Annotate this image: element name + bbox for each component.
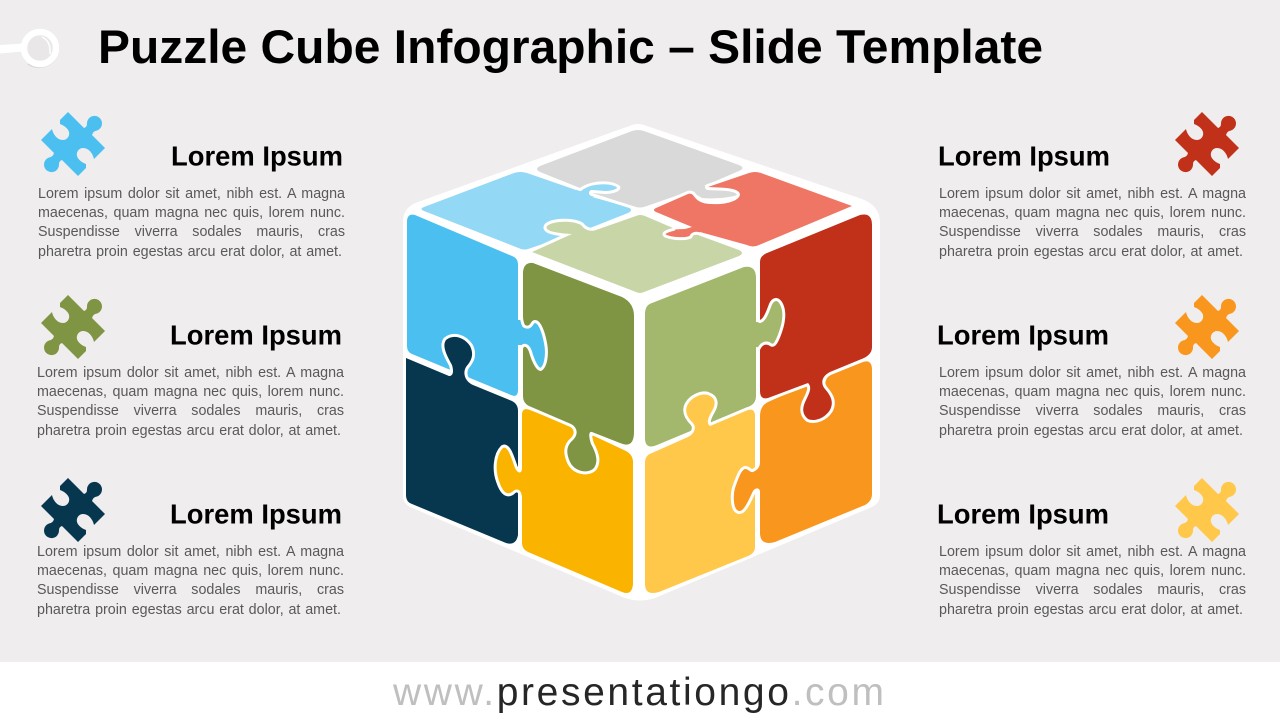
text block left 3: maecenas, quam magna nec quis, lorem nunc. [37,563,344,579]
text block left 3: pharetra proin egestas arcu erat dolor, at amet. [37,602,341,618]
icon: yellow puzzle piece [1175,478,1239,542]
text block left 1: Suspendisse viverra sodales mauris, cras [38,224,345,240]
text block left 2: maecenas, quam magna nec quis, lorem nunc. [37,384,344,400]
logo ring [0,32,58,67]
heading: Lorem Ipsum left 1: Lorem Ipsum [171,140,343,172]
piece: gray top [537,130,742,208]
piece: pale green top [532,215,742,293]
text block right 2: Suspendisse viverra sodales mauris, cras [939,403,1246,419]
icon: orange puzzle piece [1175,295,1239,359]
text block right 2: maecenas, quam magna nec quis, lorem nunc. [939,384,1246,400]
text block right 2 [939,365,1246,439]
piece: orange side [734,361,872,543]
text block right 1: Suspendisse viverra sodales mauris, cras [939,224,1246,240]
piece: navy side [406,337,518,544]
text block left 2: Suspendisse viverra sodales mauris, cras [37,403,344,419]
heading: Lorem Ipsum left 3: Lorem Ipsum [170,498,342,530]
text block left 2 [37,365,344,439]
text block left 1: pharetra proin egestas arcu erat dolor, at amet. [38,244,342,260]
heading: Lorem Ipsum left 2: Lorem Ipsum [170,320,342,350]
heading: Lorem Ipsum right 3: Lorem Ipsum [937,498,1109,530]
footer band: www.presentationgo.com [392,671,884,714]
text block right 1: maecenas, quam magna nec quis, lorem nunc. [939,205,1246,221]
piece: light blue top [422,172,631,250]
text block left 1: maecenas, quam magna nec quis, lorem nunc. [38,205,345,221]
text block right 1: pharetra proin egestas arcu erat dolor, at amet. [939,244,1243,260]
text block right 2: Lorem ipsum dolor sit amet, nibh est. A magna [939,365,1246,381]
text block right 3 [939,544,1246,618]
icon: olive puzzle piece [41,295,105,359]
puzzle cube [403,124,880,600]
footer band [0,662,1280,720]
heading: Lorem Ipsum right 1: Lorem Ipsum [938,140,1110,172]
text block right 1 [939,186,1246,260]
icon: red puzzle piece [1175,112,1239,176]
text block left 3 [37,544,344,618]
text block right 1: Lorem ipsum dolor sit amet, nibh est. A magna [939,186,1246,202]
piece: red side [760,214,872,420]
text block left 1 [38,186,345,260]
text block right 3: maecenas, quam magna nec quis, lorem nunc. [939,563,1246,579]
piece: blue side [407,215,552,396]
heading: Lorem Ipsum right 2: Lorem Ipsum [937,320,1109,350]
icon: blue puzzle piece [41,112,105,176]
text block right 2: pharetra proin egestas arcu erat dolor, at amet. [939,423,1243,439]
text block left 1: Lorem ipsum dolor sit amet, nibh est. A magna [38,186,345,202]
piece: light yellow side [645,394,755,593]
title: Puzzle Cube Infographic – Slide Template [98,20,1043,73]
cube white base [403,124,880,600]
text block left 3: Suspendisse viverra sodales mauris, cras [37,582,344,598]
piece: olive side [523,263,634,471]
piece: green side [645,267,790,446]
text block right 3: Suspendisse viverra sodales mauris, cras [939,582,1246,598]
piece: yellow side [497,409,633,593]
text block right 3: Lorem ipsum dolor sit amet, nibh est. A magna [939,544,1246,560]
text block right 3: pharetra proin egestas arcu erat dolor, at amet. [939,602,1243,618]
text block left 3: Lorem ipsum dolor sit amet, nibh est. A magna [37,544,344,560]
icon: navy puzzle piece [41,478,105,542]
text block left 2: pharetra proin egestas arcu erat dolor, at amet. [37,423,341,439]
piece: salmon top [654,172,852,246]
text block left 2: Lorem ipsum dolor sit amet, nibh est. A magna [37,365,344,381]
